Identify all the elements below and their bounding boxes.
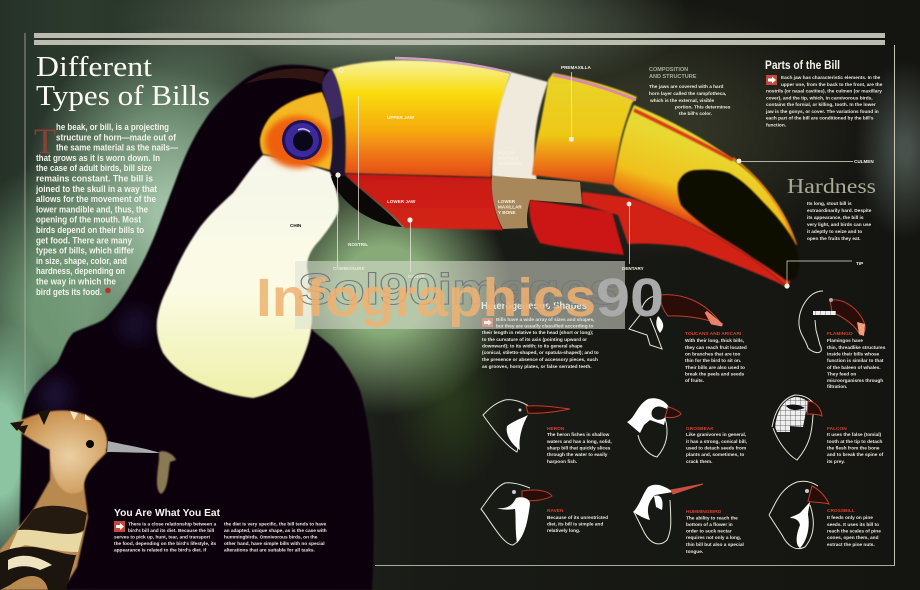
bill part labels: GONYS: [408, 274, 425, 279]
hoopoe bill: [107, 441, 160, 453]
drop cap: T: [34, 121, 56, 161]
composition and structure text: the bill's color.: [679, 111, 712, 117]
bill part labels: LOWER: [498, 199, 516, 204]
eye: [282, 120, 322, 160]
bird: falcon: [772, 395, 884, 465]
bird: raven: Because of its unrestricted: [547, 515, 608, 521]
bird: falcon: FALCON: [827, 426, 847, 432]
parts of the bill text: function.: [766, 122, 786, 128]
you are what you eat text: bird's bill and its diet. Because the bill: [128, 528, 214, 534]
intro text block: that grows as it is worn down. In: [36, 153, 160, 163]
bird: heron: waters and has a long, solid,: [546, 439, 612, 445]
bird: toucan and aracari: thin for the bird to sit on.: [685, 358, 741, 364]
parts of the bill text: upper one, from the back to the front, are the: [781, 82, 883, 88]
you are what you eat text: hummingbirds. Omnivorous birds, on the: [224, 534, 318, 540]
bill part labels: UPPER JAW: [387, 115, 415, 120]
bird: crossbill: cones, open them, and: [827, 535, 879, 541]
intro text block: in size, shape, color, and: [36, 256, 127, 266]
bird: raven: diet, its bill is simple and: [547, 522, 603, 528]
bird: flamingo: They feed on: [827, 372, 856, 378]
bird: flamingo: FLAMINGO: [827, 331, 853, 337]
bill part labels: [290, 65, 874, 279]
parts of the bill text: nostrils (or nasal cavities), the culmen (or maxillary: [766, 88, 882, 94]
bird: toucan and aracari: Their bills are also used to: [685, 365, 745, 371]
bird: hummingbird: order to suck nectar: [686, 528, 732, 534]
bird: toucan and aracari: With their long, thick bills,: [685, 338, 744, 344]
bird: crossbill: seeds. It uses its bill to: [827, 522, 879, 528]
black bill patch: [678, 170, 799, 281]
bird: falcon: It uses the false (tomial): [827, 432, 882, 438]
bird: flamingo: function is similar to that: [827, 358, 884, 364]
hardness text: very light, and birds can use: [807, 222, 872, 228]
bird: flamingo: inside their bills whose: [827, 352, 880, 358]
bird: flamingo: microorganisms through: [827, 378, 883, 384]
heterogeneous shapes text: their length in relative to the head (short or long);: [482, 330, 594, 336]
bird: crossbill: CROSSBILL: [827, 508, 855, 514]
heterogeneous shapes text: Bills have a wide array of sizes and shapes,: [496, 317, 594, 323]
bill base band: [322, 70, 345, 178]
intro text block: bird gets its food.: [36, 287, 102, 297]
bird: raven: RAVEN: [547, 508, 564, 514]
intro text block: get food. There are many: [36, 235, 133, 245]
hardness text: [787, 174, 876, 242]
bird: heron: HERON: [547, 426, 565, 432]
parts of the bill text: Parts of the Bill: [765, 58, 840, 72]
intro text block: lower mandible and, thus, the: [36, 204, 148, 214]
bird: flamingo: thin, threadlike structures: [827, 345, 886, 351]
bird: hummingbird: HUMMINGBIRD: [686, 509, 722, 515]
bird: heron: [483, 400, 612, 465]
bird: heron: sharp bill that quickly slices: [547, 446, 611, 452]
hardness text: Its long, stout bill is: [807, 201, 852, 207]
mandible bone: [492, 176, 582, 229]
intro text block: types of bills, which differ: [36, 246, 134, 256]
bird: flamingo: of the baleen of whales.: [827, 365, 881, 371]
red bill tip: [582, 192, 788, 288]
you are what you eat text: You Are What You Eat: [114, 507, 220, 519]
bill part labels: TIP: [856, 261, 863, 266]
composition and structure text: The jaws are covered with a hard: [649, 84, 724, 90]
bill part labels: Y BONE: [498, 210, 516, 215]
bird: raven: relatively long.: [547, 528, 580, 534]
intro text block: the case of adult birds, bill size: [36, 163, 152, 173]
intro text block: hardness, depending on: [36, 266, 125, 276]
intro text block: [34, 121, 179, 297]
bird: crossbill: reach the scales of pine: [827, 528, 881, 534]
title: [36, 51, 210, 112]
hardness text: it adeptly to seize and to: [807, 229, 862, 235]
intro text block: the same material as the nails—: [56, 143, 179, 153]
bird: heron: harpoon fish.: [547, 459, 577, 465]
you are what you eat text: There is a close relationship between a: [128, 522, 217, 528]
heterogeneous shapes text: to the curvature of its axis (pointing upward or: [482, 337, 587, 343]
heterogeneous shapes text: the presence or absence of accessory pieces, such: [482, 357, 598, 363]
bird: falcon: tooth at the tip to detach: [827, 439, 883, 445]
heterogeneous shapes text: but they are usually classified according to: [496, 324, 594, 330]
heterogeneous shapes text: Heterogeneous Shapes: [481, 300, 587, 312]
you are what you eat text: alterations that are suitable for all tasks.: [224, 548, 315, 554]
you are what you eat text: other hand, have simple bills with no special: [224, 541, 325, 547]
maxilla bone: [492, 72, 548, 182]
bird: falcon: the flesh from the bone: [827, 446, 880, 452]
intro text block: opening of the mouth. Most: [36, 215, 141, 225]
parts of the bill text: Each jaw has characteristic elements. In the: [781, 75, 881, 81]
body purple sheen: [39, 307, 151, 413]
watermark panel: Infographics: [256, 268, 596, 328]
premaxilla segment: [532, 73, 637, 185]
arrow icon: [766, 75, 777, 85]
lower red segment: [529, 200, 624, 255]
bird: hummingbird: [633, 484, 744, 555]
watermark panel: 90: [596, 268, 664, 328]
bird: grosbeak: Like granivores in general,: [686, 432, 746, 438]
heterogeneous shapes text: (conical, stiletto-shaped, or spatula-shaped); and to: [482, 350, 599, 356]
you are what you eat text: [114, 507, 327, 554]
bill part labels: HUESO: [498, 150, 515, 155]
bird: grosbeak: [627, 398, 747, 465]
bird: crossbill: It feeds only on pine: [827, 515, 873, 521]
you are what you eat text: appearance is related to the bird's diet. If: [114, 548, 207, 554]
bird: flamingo: Flamingos have: [827, 338, 863, 344]
culmen stripe: [634, 110, 733, 160]
heterogeneous shapes text: downward); to its width; to its general shape: [482, 344, 583, 350]
orange face: [260, 92, 333, 170]
hoopoe body: [0, 430, 107, 590]
composition and structure text: [649, 67, 731, 117]
bird: raven: [481, 483, 608, 545]
you are what you eat text: the food, depending on the bird's lifestyle, its: [114, 541, 217, 547]
upper jaw segment: [332, 60, 511, 177]
watermark panel: Sol90images: [298, 265, 618, 314]
front bill segment: [613, 105, 796, 288]
bill part labels: PREMAXILLA: [561, 65, 592, 70]
hoopoe plumage stripes: [0, 506, 87, 590]
intro text block: he beak, or bill, is a projecting: [56, 122, 169, 132]
bird: grosbeak: used to detach seeds from: [686, 446, 746, 452]
bill part labels: CULMEN: [854, 159, 874, 164]
bird: grosbeak: it has a strong, conical bill,: [686, 439, 747, 445]
bird: hummingbird: bottom of a flower in: [686, 522, 733, 528]
bill part labels: MAXILLA: [498, 156, 519, 160]
composition and structure text: portion. This determines: [675, 104, 731, 110]
parts of the bill text: each part of the bill are conditioned by the bill's: [766, 116, 874, 122]
hoopoe head: [12, 410, 107, 494]
composition and structure text: AND STRUCTURE: [649, 74, 697, 80]
bird: toucan and aracari: [629, 295, 747, 384]
bird: falcon: its prey.: [827, 459, 845, 465]
bird: falcon: and to break the spine of: [827, 452, 884, 458]
parts of the bill text: jaw is the gonys, or cover. The variations found in: [765, 109, 879, 115]
bird: toucan and aracari: TOUCANS AND ARICARI: [685, 331, 742, 337]
caterpillar: [157, 451, 176, 494]
bird: heron: through the water to easily: [547, 452, 608, 458]
parts of the bill text: contains the fornial, or killing, tooth. In the lower: [766, 102, 876, 108]
title: Different: [36, 51, 152, 83]
parts of the bill text: [765, 58, 883, 128]
bill part labels: DENTARY: [622, 266, 644, 271]
bird: crossbill: extract the pine nuts.: [827, 542, 875, 548]
you are what you eat text: the diet is very specific, the bill tends to have: [224, 522, 327, 528]
hoopoe photograph: [0, 409, 176, 590]
bird: toucan and aracari: break the peels and seeds: [685, 372, 744, 378]
hardness text: open the fruits they eat.: [807, 236, 861, 242]
intro text block: structure of horn—made out of: [56, 132, 177, 142]
bill part labels: CHIN: [290, 223, 302, 228]
bird: toucan and aracari: of fruits.: [685, 378, 704, 384]
hardness text: extraordinarily hard. Despite: [807, 208, 872, 214]
bird: toucan and aracari: on branches that are too: [685, 352, 741, 358]
composition and structure text: which is the external, visible: [649, 98, 715, 104]
composition and structure text: COMPOSITION: [649, 67, 688, 73]
bill part labels: LOWER JAW: [387, 199, 416, 204]
toucan photograph: [18, 58, 799, 590]
head brown sheen: [245, 68, 325, 84]
intro text block: remains constant. The bill is: [36, 174, 153, 184]
composition and structure text: horn layer called the rampfotheca,: [649, 91, 726, 97]
bill part labels: SUPERIOR: [498, 161, 523, 166]
you are what you eat text: serves to pick up, hunt, tear, and transport: [114, 534, 210, 540]
bird: hummingbird: requires not only a long,: [686, 535, 741, 541]
hardness text: its appearance, the bill is: [807, 215, 864, 221]
parts of the bill text: cover), and the tip, which, in carnivorous birds,: [766, 96, 873, 102]
bird: heron: The heron fishes in shallow: [547, 432, 610, 438]
bill callout lines: [335, 68, 853, 289]
you are what you eat text: an adapted, unique shape, as is the case with: [224, 528, 327, 534]
title: Types of Bills: [36, 80, 210, 112]
bird: hummingbird: tongue.: [686, 549, 703, 555]
bird: grosbeak: GROSBEAK: [686, 426, 714, 432]
bird: grosbeak: plants and, sometimes, to: [686, 452, 744, 458]
heterogeneous shapes text: as grooves, horny plates, or false serrated teeth.: [482, 364, 592, 370]
bill part labels: COMMISSURE: [333, 266, 365, 271]
bird: flamingo: filtration.: [827, 384, 847, 390]
hardness text: Hardness: [787, 174, 876, 198]
bird: grosbeak: crack them.: [686, 459, 712, 465]
bird: hummingbird: thin bill but also a special: [686, 542, 744, 548]
bird: flamingo: [799, 291, 886, 390]
white bib: [157, 155, 339, 398]
toucan body and head: [18, 65, 374, 590]
intro text block: the way in which the: [36, 276, 116, 286]
intro text block: birds depend on their bills to: [36, 225, 144, 235]
bird: hummingbird: The ability to reach the: [686, 516, 738, 522]
bird: crossbill: [769, 481, 881, 549]
bird: toucan and aracari: they can reach fruit located: [685, 345, 747, 351]
heterogeneous shapes text: [481, 300, 599, 370]
lower jaw segment: [345, 174, 503, 230]
intro text block: joined to the skull in a way that: [35, 184, 157, 194]
bill part labels: MAXILLAR: [498, 204, 522, 210]
intro text block: allows for the movement of the: [36, 194, 156, 204]
bill part labels: NOSTRIL: [348, 242, 368, 247]
